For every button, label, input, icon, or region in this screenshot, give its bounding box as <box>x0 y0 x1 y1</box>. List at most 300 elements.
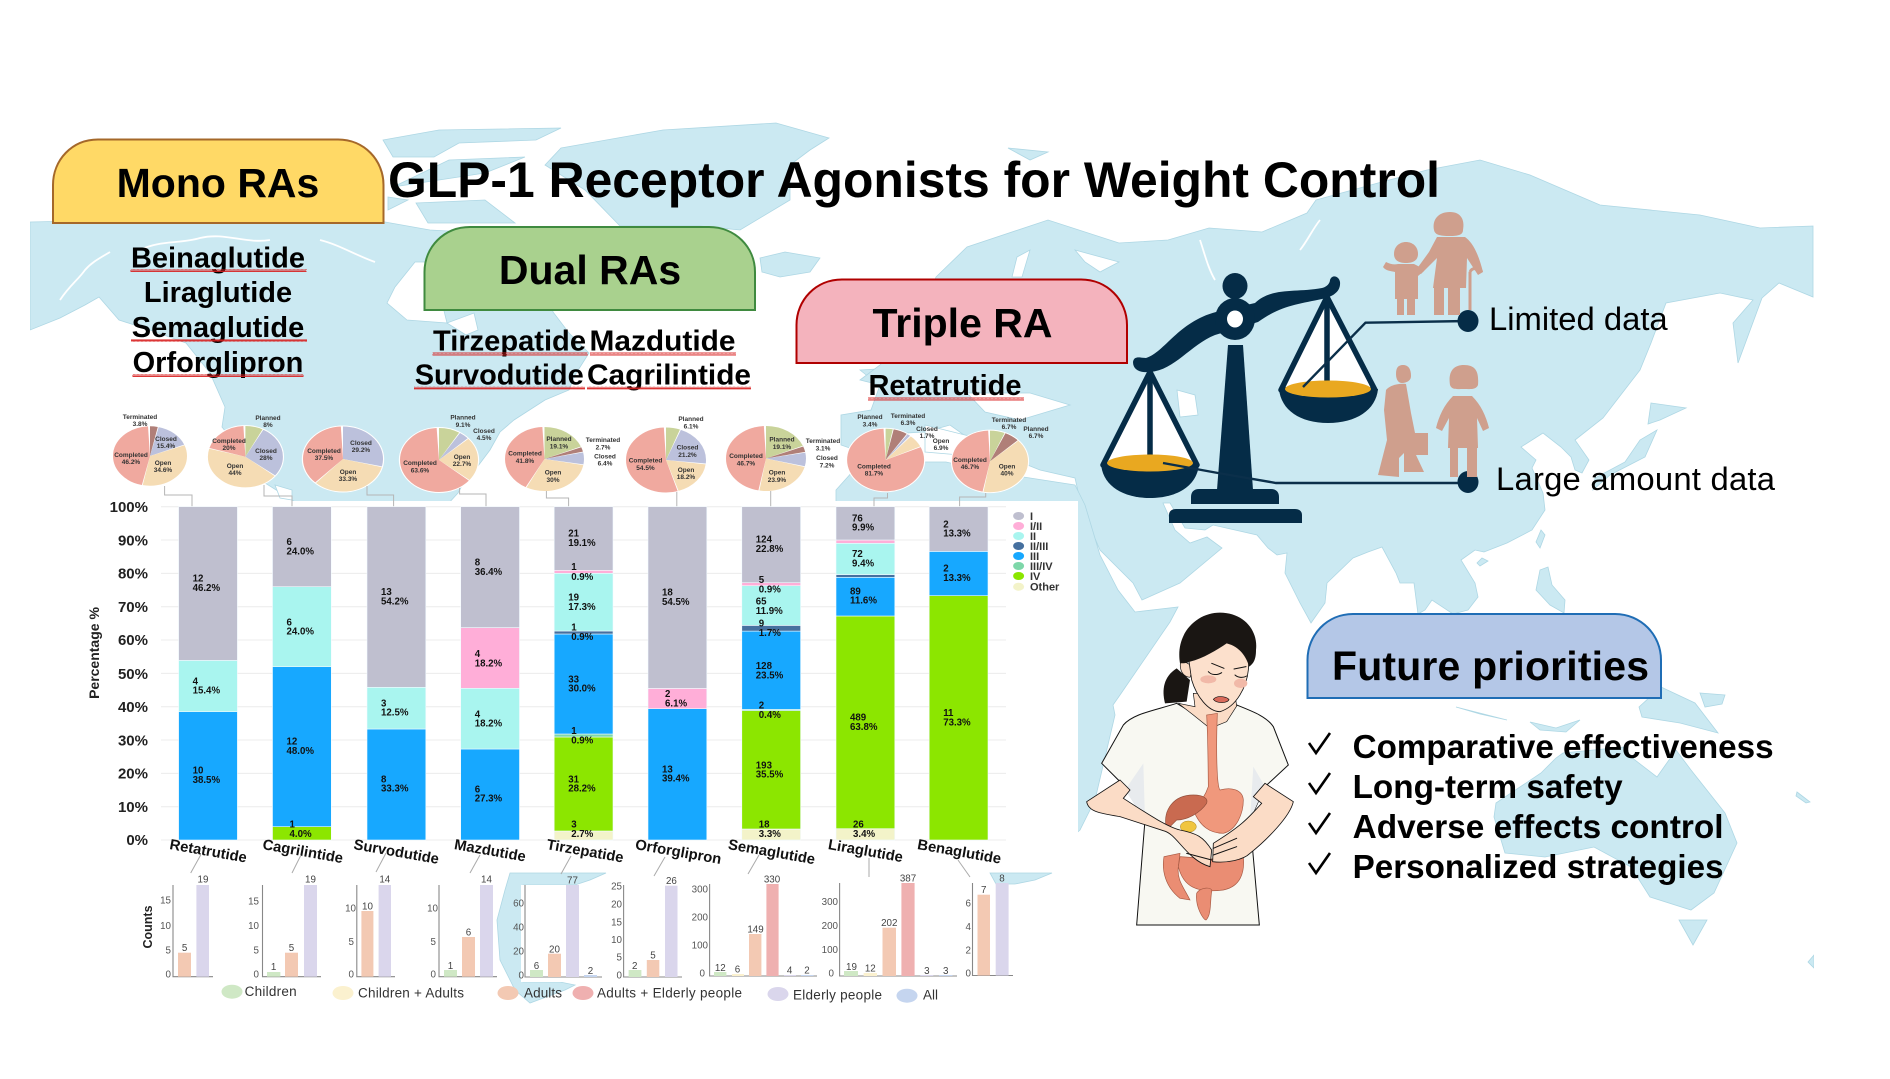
pie chart: Benaglutide: 40% <box>1000 470 1014 478</box>
count chart: Tirzepatide: 0 <box>519 970 525 982</box>
pie chart: Orforglipron: Planned <box>678 416 704 423</box>
pie chart: Retatrutide: Open <box>155 460 171 467</box>
checklist: future priorities: Adverse effects control <box>1353 808 1724 845</box>
bar value labels: 124 <box>756 535 772 546</box>
legend: trial phase: I <box>1030 511 1033 523</box>
bar value labels: 18.2% <box>475 658 503 669</box>
count chart: Retatrutide: 5 <box>166 946 172 956</box>
count chart: Retatrutide: 10 <box>160 921 172 932</box>
bar value labels: 13 <box>381 587 392 598</box>
count chart: Cagrilintide: 15 <box>248 896 260 908</box>
bar value labels: 193 <box>756 760 772 771</box>
pie chart: Tirzepatide <box>504 426 620 492</box>
bar: Mazdutide <box>461 507 520 840</box>
bar value labels: 13 <box>662 764 673 775</box>
bar value labels: 0.9% <box>571 632 594 643</box>
y axis labels: 30% <box>118 732 148 750</box>
text block: dual drug names: Survodutide <box>415 360 584 392</box>
pie chart: Mazdutide: Open <box>454 454 470 461</box>
count chart: Orforglipron: 5 <box>650 950 656 962</box>
text block: dual drug names: Tirzepatide <box>433 326 586 358</box>
count chart: Benaglutide: 4 <box>966 922 972 933</box>
legend: age groups: Children <box>245 984 297 999</box>
pie chart: Survodutide <box>302 426 384 492</box>
pie chart: Survodutide: Completed <box>307 448 341 455</box>
bar value labels: 9.4% <box>852 558 874 569</box>
count chart: Liraglutide: 3 <box>924 966 930 977</box>
pie chart: Retatrutide: 34.6% <box>154 467 172 474</box>
count chart: Benaglutide: 6 <box>966 898 972 910</box>
count chart: Orforglipron: 5 <box>617 952 623 964</box>
legend: trial phase: I/II <box>1030 521 1042 533</box>
bar value labels: 0.4% <box>759 710 781 721</box>
pie chart: Benaglutide: Terminated <box>992 417 1026 424</box>
bar value labels: 48.0% <box>286 746 314 757</box>
count chart: Liraglutide: 19 <box>846 962 857 973</box>
bar value labels: 11.9% <box>756 606 783 617</box>
bar value labels: 2.7% <box>571 829 594 840</box>
pie chart: Survodutide: Open <box>340 469 356 476</box>
count chart: Orforglipron <box>611 876 682 982</box>
bar value labels: 26 <box>853 820 864 830</box>
bar value labels: 8 <box>475 558 480 569</box>
count chart: Retatrutide: 0 <box>166 970 172 980</box>
bar value labels: 0.9% <box>571 735 594 746</box>
pie chart: Retatrutide: 46.2% <box>122 459 140 466</box>
count chart: Tirzepatide <box>513 876 611 982</box>
pie chart: Semaglutide: Closed <box>816 455 838 462</box>
bar category names: Cagrilintide <box>261 837 344 867</box>
count chart: Orforglipron: 15 <box>611 918 623 928</box>
count chart: Mazdutide: 10 <box>427 904 439 914</box>
bar value labels: 8 <box>381 774 386 785</box>
count chart: Semaglutide <box>692 874 817 980</box>
bar value labels: 2 <box>943 564 949 575</box>
legend: age groups: All <box>923 987 938 1002</box>
legend: trial phase: Other <box>1030 582 1060 594</box>
text block: mono drug names: Liraglutide <box>144 277 292 309</box>
bar value labels: 11 <box>943 708 953 719</box>
pie chart: Semaglutide: Terminated <box>806 438 840 445</box>
bar value labels: 5 <box>759 575 764 586</box>
text block: mono drug names: Beinaglutide <box>131 242 305 274</box>
checklist: future priorities: Comparative effectiveness <box>1353 728 1774 765</box>
legend: age groups: Elderly people <box>793 987 882 1002</box>
bar value labels: 23.5% <box>756 670 784 681</box>
bar value labels: 24.0% <box>286 627 314 638</box>
bar value labels: 27.3% <box>475 794 503 805</box>
pie chart: Liraglutide: 6.9% <box>934 445 949 452</box>
pie chart: Semaglutide: Planned <box>769 436 795 444</box>
legend: age groups <box>222 984 938 1003</box>
bar value labels: 128 <box>756 661 772 672</box>
pie chart: Tirzepatide: 2.7% <box>596 444 611 452</box>
bar value labels: 3.4% <box>853 829 875 840</box>
legend: trial phase: IV <box>1030 571 1041 583</box>
count chart: Survodutide: 5 <box>349 937 355 948</box>
pie chart: Tirzepatide: Closed <box>594 454 616 460</box>
pie chart: Liraglutide: 81.7% <box>865 470 883 478</box>
panel: Future priorities header <box>1308 614 1661 698</box>
pie chart: Cagrilintide: Closed <box>255 448 277 455</box>
legend: trial phase: III <box>1030 551 1039 563</box>
legend: trial phase: III/IV <box>1030 561 1053 573</box>
legend: age groups: Adults + Elderly people <box>597 985 742 1000</box>
legend: age groups: Children + Adults <box>358 985 464 1000</box>
pie chart: Retatrutide <box>112 414 188 487</box>
count chart: Orforglipron: 2 <box>632 961 637 972</box>
bar value labels: 6 <box>475 784 480 795</box>
pie chart: Tirzepatide: Open <box>545 470 561 476</box>
count chart: Cagrilintide: 5 <box>254 946 260 956</box>
count chart: Semaglutide: 4 <box>787 966 793 976</box>
text block: mono drug names: Orforglipron <box>133 347 303 379</box>
bar value labels: 31 <box>568 774 579 785</box>
count chart: Survodutide: 10 <box>362 902 373 912</box>
legend: trial phase <box>1013 511 1060 594</box>
count chart: Semaglutide: 2 <box>804 966 810 976</box>
pie chart: Orforglipron <box>625 416 707 493</box>
leader lines from bars to count charts <box>191 853 970 877</box>
bar value labels: 19 <box>568 593 579 604</box>
bar value labels: 1 <box>571 623 577 634</box>
icon: elderly couple <box>1378 365 1489 477</box>
illustration: woman with stomach pain <box>1087 613 1293 925</box>
bar: Retatrutide <box>179 507 237 840</box>
bar value labels: 65 <box>756 596 767 607</box>
count chart: Liraglutide: 0 <box>829 968 835 980</box>
text block: dual drug names: Mazdutide <box>590 326 736 358</box>
pie chart: Mazdutide: 22.7% <box>453 461 471 468</box>
y axis labels: 0% <box>126 832 148 849</box>
bar: Cagrilintide <box>272 507 331 840</box>
count chart: Retatrutide: 19 <box>198 874 208 886</box>
legend: age groups: Adults <box>524 985 562 1000</box>
pie chart: Liraglutide: 6.3% <box>901 420 916 427</box>
bar value labels: 9.9% <box>852 523 874 534</box>
count chart: Semaglutide: 330 <box>764 874 781 886</box>
pie chart: Semaglutide: 46.7% <box>737 460 755 468</box>
count chart: Benaglutide: 0 <box>966 968 972 980</box>
pie chart: Benaglutide: 6.7% <box>1029 433 1044 440</box>
bar value labels: 46.2% <box>193 583 220 594</box>
bar category names: Liraglutide <box>827 837 904 866</box>
bar: Orforglipron <box>648 507 707 840</box>
pie chart: Benaglutide: Open <box>999 464 1015 470</box>
y axis labels: 100% <box>110 499 148 516</box>
pie chart: Tirzepatide: 19.1% <box>550 444 568 450</box>
panel: Mono RAs header <box>53 140 384 223</box>
pie chart: Mazdutide: Closed <box>473 428 495 435</box>
count chart: Tirzepatide: 40 <box>513 922 525 934</box>
count chart: Survodutide: 0 <box>349 970 355 980</box>
bar value labels: 54.5% <box>662 597 690 608</box>
count chart: Tirzepatide: 6 <box>534 961 540 972</box>
bar value labels: 18.2% <box>475 719 503 730</box>
count chart: Retatrutide: 15 <box>160 896 172 906</box>
pie to bar connector lines <box>165 485 986 507</box>
bar value labels: 1.7% <box>759 628 781 639</box>
bar value labels: 3 <box>571 820 577 830</box>
pie chart: Retatrutide: Completed <box>114 452 148 459</box>
count chart: Cagrilintide: 1 <box>271 962 276 973</box>
pie chart: Semaglutide: 3.1% <box>816 446 831 452</box>
y axis labels: 60% <box>118 632 148 649</box>
y axis labels: 70% <box>118 599 148 616</box>
bar category names: Semaglutide <box>727 837 816 868</box>
heading: main title: GLP-1 Receptor Agonists for Weight Control <box>388 152 1440 208</box>
bar value labels: 19.1% <box>568 538 596 549</box>
text block: mono drug names <box>130 242 307 379</box>
bar: Tirzepatide <box>554 507 613 840</box>
connector: limited data <box>1303 310 1478 387</box>
pie chart: Tirzepatide: Planned <box>546 436 572 443</box>
bar value labels: 0.9% <box>571 572 594 583</box>
bar category names: Benaglutide <box>916 837 1002 868</box>
bar: Semaglutide <box>742 507 801 840</box>
pie chart: Benaglutide <box>951 417 1049 493</box>
pie chart: Benaglutide: Completed <box>953 457 987 464</box>
count chart: Semaglutide: 0 <box>700 968 706 980</box>
count chart: Benaglutide: 7 <box>981 885 986 896</box>
pie chart: Survodutide: Closed <box>350 440 372 447</box>
checklist: future priorities: Personalized strategies <box>1353 848 1724 885</box>
bar value labels: 3.3% <box>759 829 781 840</box>
count chart: Orforglipron: 20 <box>611 900 623 910</box>
y axis labels <box>86 499 148 849</box>
pie chart: Tirzepatide: 30% <box>546 477 560 484</box>
bar value labels: 6 <box>286 537 292 548</box>
count chart: Mazdutide: 0 <box>431 970 437 980</box>
pie chart: Cagrilintide: 44% <box>228 470 242 477</box>
y axis labels: Percentage % <box>86 607 102 699</box>
bar value labels: 10 <box>193 765 203 776</box>
pie chart: Mazdutide: Planned <box>450 414 476 422</box>
bar value labels: 4 <box>193 676 198 687</box>
bar value labels: 21 <box>568 529 579 540</box>
pie chart: Orforglipron: Completed <box>629 458 662 464</box>
pie chart: Retatrutide: 3.8% <box>133 421 148 428</box>
pie chart: Benaglutide: Planned <box>1023 426 1049 433</box>
bar category names: Retatrutide <box>168 837 248 867</box>
count chart: Survodutide: 14 <box>379 874 391 886</box>
count chart: Benaglutide: 2 <box>966 946 971 956</box>
bar value labels: 63.8% <box>850 722 878 733</box>
pie chart: Liraglutide: 3.4% <box>863 422 878 428</box>
pie chart: Semaglutide: 7.2% <box>820 462 835 470</box>
panel: Mono RAs header: Mono RAs <box>117 160 319 206</box>
bar value labels: 6.1% <box>665 698 687 709</box>
pie chart: Orforglipron: Closed <box>677 444 698 452</box>
panel: Dual RAs header <box>424 227 755 310</box>
y axis labels: 50% <box>118 666 148 683</box>
bar value labels: 0.9% <box>759 584 781 595</box>
count chart: Orforglipron: 25 <box>611 882 623 892</box>
bar value labels: 39.4% <box>662 774 690 785</box>
count chart: Semaglutide: 200 <box>692 912 709 924</box>
bar value labels: 4.0% <box>290 829 312 840</box>
bar value labels: 2 <box>759 701 764 712</box>
panel: Triple RA header <box>796 280 1127 363</box>
count chart: Semaglutide: 100 <box>692 940 709 952</box>
bar value labels: 6 <box>286 617 292 628</box>
pie chart: Cagrilintide: 8% <box>263 422 273 429</box>
checklist: future priorities: Long-term safety <box>1353 768 1623 805</box>
pie chart: Tirzepatide: Terminated <box>586 437 620 444</box>
bar: Liraglutide <box>836 507 895 840</box>
count chart: Tirzepatide: 20 <box>549 944 560 956</box>
bar value labels: 54.2% <box>381 596 409 607</box>
pie chart: Benaglutide: 6.7% <box>1002 424 1017 431</box>
bar value labels: 76 <box>852 513 863 524</box>
text block: triple drug name: Retatrutide <box>868 370 1022 402</box>
text block: dual drug names: Cagrilintide <box>587 360 751 392</box>
axis label: Counts: Counts <box>141 905 155 949</box>
count chart: Liraglutide: 3 <box>943 966 949 977</box>
count chart: Liraglutide: 300 <box>822 897 839 908</box>
bar value labels: 1 <box>290 820 295 830</box>
y axis labels: 10% <box>118 799 148 816</box>
count chart: Semaglutide: 300 <box>692 884 709 896</box>
text: Limited data: Limited data <box>1489 300 1668 337</box>
bar value labels: 18 <box>662 588 673 599</box>
bar value labels: 73.3% <box>943 717 971 728</box>
panel: Dual RAs header: Dual RAs <box>499 247 681 293</box>
pie chart: Mazdutide: 63.6% <box>411 468 429 474</box>
bar value labels: 13.3% <box>943 529 971 540</box>
checklist: future priorities <box>1309 728 1774 885</box>
count chart: Mazdutide: 5 <box>431 937 437 948</box>
count chart: Mazdutide: 14 <box>481 874 492 886</box>
count chart: Liraglutide: 200 <box>822 921 839 932</box>
y axis labels: 20% <box>118 766 148 782</box>
pie chart: Retatrutide: Terminated <box>123 414 157 421</box>
text: Large amount data: Large amount data <box>1496 460 1776 497</box>
count chart: Liraglutide: 202 <box>881 918 897 929</box>
bar category names: Mazdutide <box>453 837 527 866</box>
count chart: Mazdutide <box>427 874 497 980</box>
bar value labels: 35.5% <box>756 770 784 781</box>
text block: dual drug names <box>414 326 751 392</box>
bar category names <box>168 837 1002 868</box>
stacked bar chart: trial phases <box>86 499 1060 868</box>
panel: Triple RA header: Triple RA <box>873 300 1052 346</box>
pie chart: Semaglutide: 19.1% <box>773 444 791 451</box>
count chart: Tirzepatide: 2 <box>588 966 593 977</box>
bar value labels: 33 <box>568 674 579 685</box>
pie chart: Retatrutide: Closed <box>155 436 177 443</box>
bar value labels: 38.5% <box>193 775 220 786</box>
world map background <box>30 123 1814 968</box>
pie chart: Cagrilintide: Completed <box>212 438 246 445</box>
y axis labels: 40% <box>118 699 148 716</box>
count chart: Survodutide <box>345 874 395 980</box>
bar value labels: 17.3% <box>568 602 596 613</box>
count chart: Cagrilintide: 0 <box>254 970 260 980</box>
pie chart: Mazdutide <box>399 414 495 493</box>
pie chart: Cagrilintide: Planned <box>255 415 281 422</box>
count chart: Cagrilintide: 5 <box>289 943 295 954</box>
count chart: Retatrutide <box>160 874 213 980</box>
pie chart: Survodutide: 29.2% <box>352 447 370 454</box>
bar value labels: 4 <box>475 649 480 660</box>
bar value labels: 24.0% <box>286 546 314 558</box>
pie chart: Tirzepatide: 6.4% <box>598 460 613 468</box>
pie chart: Cagrilintide <box>207 415 284 488</box>
bar value labels: 11.6% <box>850 596 877 607</box>
bar value labels: 33.3% <box>381 784 409 795</box>
pie chart: Orforglipron: 6.1% <box>684 424 699 430</box>
icon: balance scale <box>1101 273 1378 523</box>
bar category names: Orforglipron <box>634 837 723 868</box>
count chart: Benaglutide <box>966 874 1013 980</box>
pie chart: Survodutide: 37.5% <box>315 455 333 462</box>
legend: trial phase: II/III <box>1030 541 1048 553</box>
bar: Benaglutide <box>929 507 988 840</box>
pie chart: Tirzepatide: Completed <box>508 450 542 458</box>
count chart: Liraglutide: 100 <box>822 945 839 956</box>
count chart: Tirzepatide: 77 <box>567 876 578 886</box>
pie chart: Liraglutide <box>846 413 949 492</box>
pie chart: Orforglipron: 18.2% <box>677 474 695 481</box>
y axis labels: 90% <box>118 532 148 550</box>
bar value labels: 89 <box>850 586 861 597</box>
map fragment: South America <box>497 873 606 1003</box>
count chart: Semaglutide: 6 <box>735 964 741 976</box>
icon: elderly woman and child <box>1383 212 1483 315</box>
count chart: Semaglutide: 149 <box>747 924 764 936</box>
pie chart: Liraglutide: Completed <box>857 464 891 470</box>
bar value labels: 72 <box>852 549 863 560</box>
pie chart: Mazdutide: 9.1% <box>456 422 471 429</box>
bar value labels: 22.8% <box>756 544 784 555</box>
pie chart: Semaglutide <box>725 425 840 492</box>
pie chart: Liraglutide: Planned <box>857 414 883 421</box>
pie chart: Liraglutide: Open <box>933 438 949 445</box>
pie chart: Benaglutide: 46.7% <box>961 464 979 471</box>
bar value labels: 18 <box>759 820 770 830</box>
legend: trial phase: II <box>1030 531 1036 543</box>
count chart: Orforglipron: 10 <box>611 935 623 946</box>
chart panel: white background <box>30 501 1078 1079</box>
pie chart: Semaglutide: Completed <box>729 453 763 460</box>
pie chart: Mazdutide: 4.5% <box>477 435 492 442</box>
bar category names: Survodutide <box>352 837 440 868</box>
pie chart: Liraglutide: Closed <box>916 426 938 433</box>
connector: large amount data <box>1163 463 1478 493</box>
pie chart: Liraglutide: 1.7% <box>920 433 935 440</box>
bar value labels: 3 <box>381 698 386 709</box>
bar value labels: 15.4% <box>193 686 220 697</box>
bar value labels: 1 <box>571 562 577 573</box>
bar value labels: 12 <box>193 574 203 585</box>
bar value labels: 1 <box>571 726 577 737</box>
bar category names: Tirzepatide <box>545 837 625 866</box>
count chart: Liraglutide: 387 <box>900 874 916 884</box>
count chart: Tirzepatide: 60 <box>513 898 525 910</box>
panel: Future priorities header: Future priorities <box>1332 643 1649 689</box>
icon: check mark <box>1309 733 1330 753</box>
pie chart: Cagrilintide: Open <box>227 463 243 470</box>
bar value labels: 13.3% <box>943 573 971 584</box>
pie chart: Orforglipron: 54.5% <box>636 465 655 472</box>
icon: check mark <box>1309 813 1330 833</box>
text block: mono drug names: Semaglutide <box>132 312 304 344</box>
map fragment: Africa tip <box>990 873 1052 884</box>
y axis labels: 80% <box>118 566 148 582</box>
bar: Survodutide <box>367 507 426 840</box>
count chart: Benaglutide: 8 <box>999 874 1005 884</box>
